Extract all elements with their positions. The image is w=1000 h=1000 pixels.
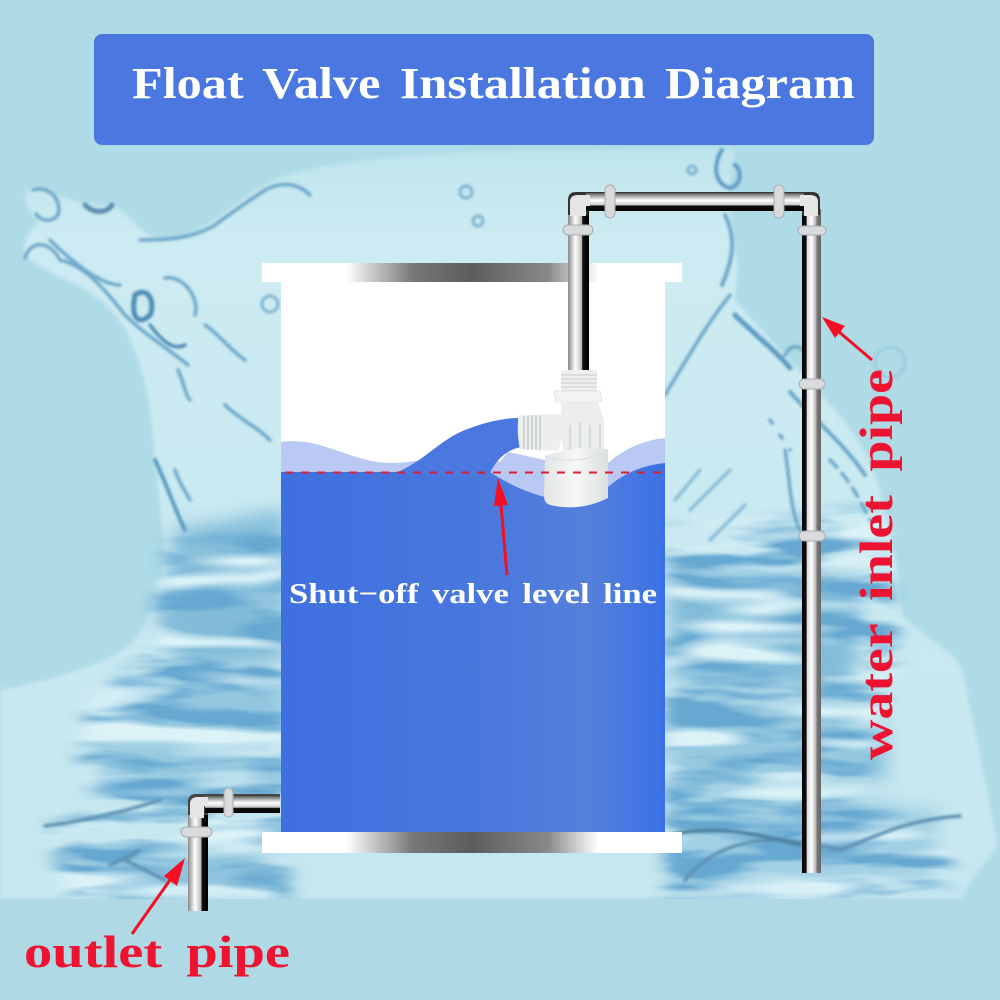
ripple texture xyxy=(0,500,1000,900)
label: shut-off valve level line: Shut−off valve level line xyxy=(289,578,657,610)
flange xyxy=(554,391,602,402)
body xyxy=(561,402,604,450)
threaded top xyxy=(561,370,597,398)
outlet pipe xyxy=(181,788,280,911)
side outlet threaded xyxy=(518,414,563,451)
icon: white float valve xyxy=(518,370,608,507)
water tank xyxy=(262,263,682,853)
title banner xyxy=(94,34,874,145)
mid-tone water masses xyxy=(90,510,940,895)
label: water inlet pipe: water inlet pipe xyxy=(851,369,903,760)
bottom rim xyxy=(262,832,682,853)
top rim xyxy=(262,263,682,282)
shut-off level line xyxy=(285,472,665,474)
title text: Float Valve Installation Diagram xyxy=(132,59,855,108)
tank body xyxy=(281,282,665,472)
droplets xyxy=(262,166,905,377)
right light wave xyxy=(608,438,665,490)
arrow: to outlet pipe xyxy=(132,858,185,934)
water surface light wave xyxy=(281,441,545,498)
water body xyxy=(281,463,665,832)
pipe clamps xyxy=(181,788,233,837)
splash detail strokes xyxy=(25,150,960,880)
arrow: to level line xyxy=(494,478,508,575)
float cup xyxy=(544,448,608,507)
pipe clamps xyxy=(563,185,826,541)
inlet pipe xyxy=(563,185,826,873)
splash silhouette xyxy=(0,148,998,899)
water stream from valve xyxy=(398,418,521,473)
background: water splash xyxy=(0,147,998,932)
arrow: to inlet pipe xyxy=(822,317,872,360)
label: outlet pipe: outlet pipe xyxy=(24,927,290,977)
